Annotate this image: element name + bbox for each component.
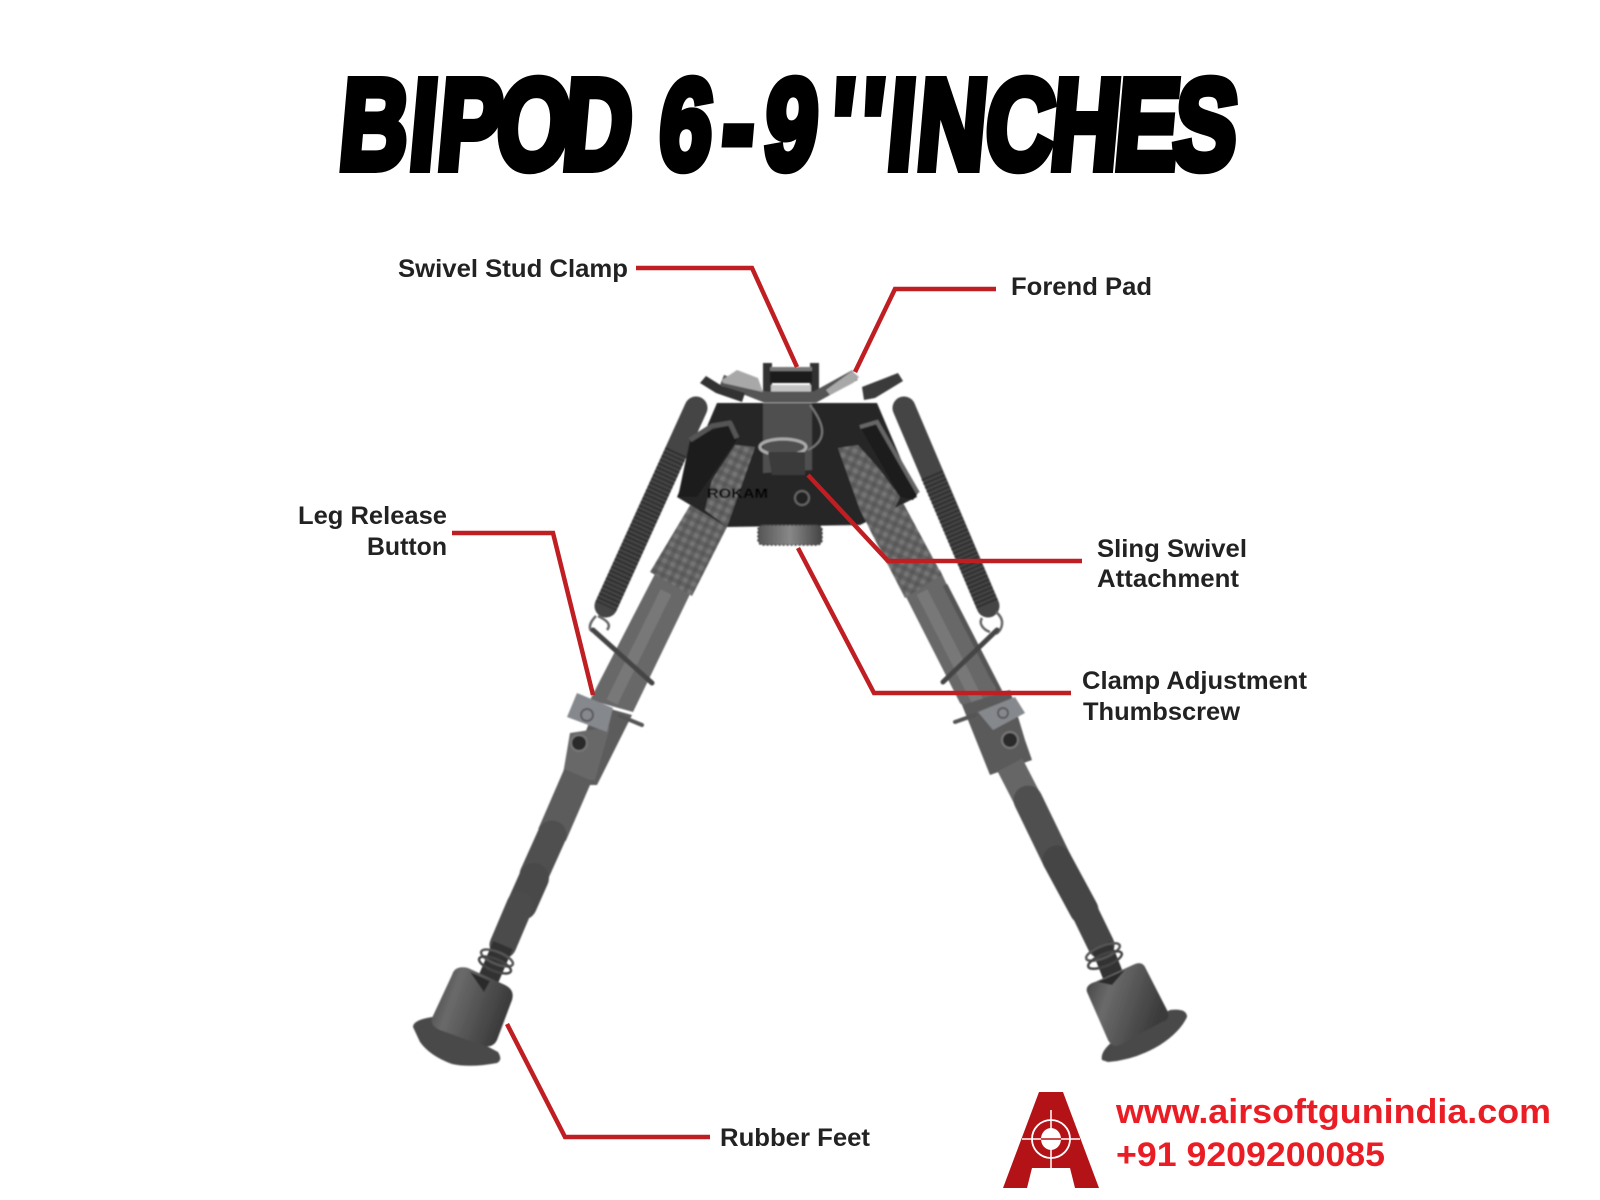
label: Leg Release Button: Leg Release xyxy=(298,502,447,530)
label: Forend Pad: Forend Pad xyxy=(1011,273,1152,301)
label: Swivel Stud Clamp: Swivel Stud Clamp xyxy=(398,255,628,283)
label: Sling Swivel Attachment: Sling Swivel xyxy=(1097,535,1247,563)
right leg xyxy=(838,445,1187,1062)
brand watermark: ROKAM xyxy=(707,485,768,501)
label: Swivel Stud Clamp xyxy=(398,255,797,367)
contact details: www.airsoftgunindia.com xyxy=(1115,1093,1551,1131)
contact details: +91 9209200085 xyxy=(1116,1136,1385,1174)
label: Leg Release Button xyxy=(298,502,593,695)
label: Rubber Feet: Rubber Feet xyxy=(720,1124,871,1152)
left leg xyxy=(413,445,753,1066)
label: Sling Swivel Attachment: Attachment xyxy=(1097,565,1240,593)
bipod head xyxy=(677,363,918,545)
label: Sling Swivel Attachment xyxy=(808,475,1247,593)
label: Leg Release Button: Button xyxy=(367,533,447,561)
left spring xyxy=(590,408,696,631)
label: Clamp Adjustment Thumbscrew: Clamp Adjustment xyxy=(1082,667,1308,695)
contact details xyxy=(1115,1093,1551,1174)
logo: letter A with reticle xyxy=(1003,1092,1099,1188)
right spring xyxy=(904,408,1002,634)
label: Rubber Feet xyxy=(507,1024,871,1152)
title: BIPOD 6-9''INCHES xyxy=(334,53,1244,196)
bipod illustration xyxy=(413,363,1187,1066)
label: Forend Pad xyxy=(855,273,1152,372)
forend pad xyxy=(700,370,903,402)
tension knob xyxy=(758,525,822,545)
label: Clamp Adjustment Thumbscrew xyxy=(798,548,1308,726)
label: Clamp Adjustment Thumbscrew: Thumbscrew xyxy=(1083,698,1241,726)
swivel clamp frame xyxy=(763,363,819,395)
